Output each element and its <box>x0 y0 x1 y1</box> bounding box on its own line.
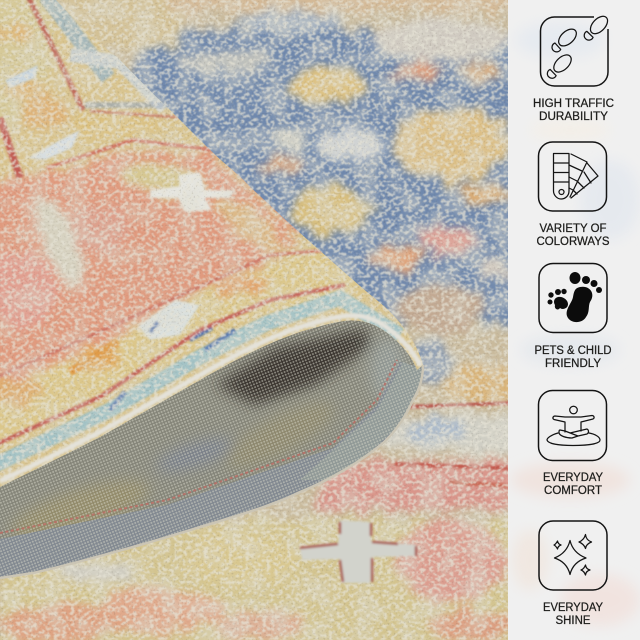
feature: everyday shine <box>539 521 607 627</box>
icon: paw and footprint <box>539 264 607 332</box>
feature: variety of colorways: COLORWAYS <box>536 236 610 248</box>
curved border lines <box>0 250 330 378</box>
icon: footprints <box>540 13 611 86</box>
icon: colour swatch fan <box>538 142 606 211</box>
feature: high traffic durability: DURABILITY <box>539 111 608 123</box>
label: PETS & CHILD <box>534 345 612 357</box>
feature: everyday comfort: COMFORT <box>544 485 602 497</box>
floor cross motif <box>300 520 416 583</box>
back weave <box>0 320 422 577</box>
label: EVERYDAY <box>543 472 603 484</box>
rug rim edge <box>0 315 423 578</box>
icon: meditating figure <box>538 390 606 460</box>
right feature panel <box>508 0 640 640</box>
feature: pets and child friendly <box>534 264 612 370</box>
back stitching line <box>0 360 397 533</box>
feature: pets and child friendly: FRIENDLY <box>545 358 601 370</box>
top-left border stripes <box>28 0 83 110</box>
back border band <box>0 362 430 590</box>
rolled rug back side <box>0 320 422 577</box>
icon: sparkles <box>539 521 607 590</box>
feature: everyday shine: SHINE <box>556 615 591 627</box>
floor weave flecks <box>0 0 510 640</box>
label: VARIETY OF <box>540 223 606 235</box>
feature: high traffic durability <box>533 13 614 123</box>
feature: everyday comfort <box>538 390 606 497</box>
rolled rug top surface <box>0 0 430 490</box>
rolled cross motif <box>150 172 235 212</box>
label: EVERYDAY <box>543 602 603 614</box>
feature: variety of colorways <box>536 142 610 248</box>
blue-white motifs <box>28 130 80 160</box>
label: HIGH TRAFFIC <box>533 98 614 110</box>
